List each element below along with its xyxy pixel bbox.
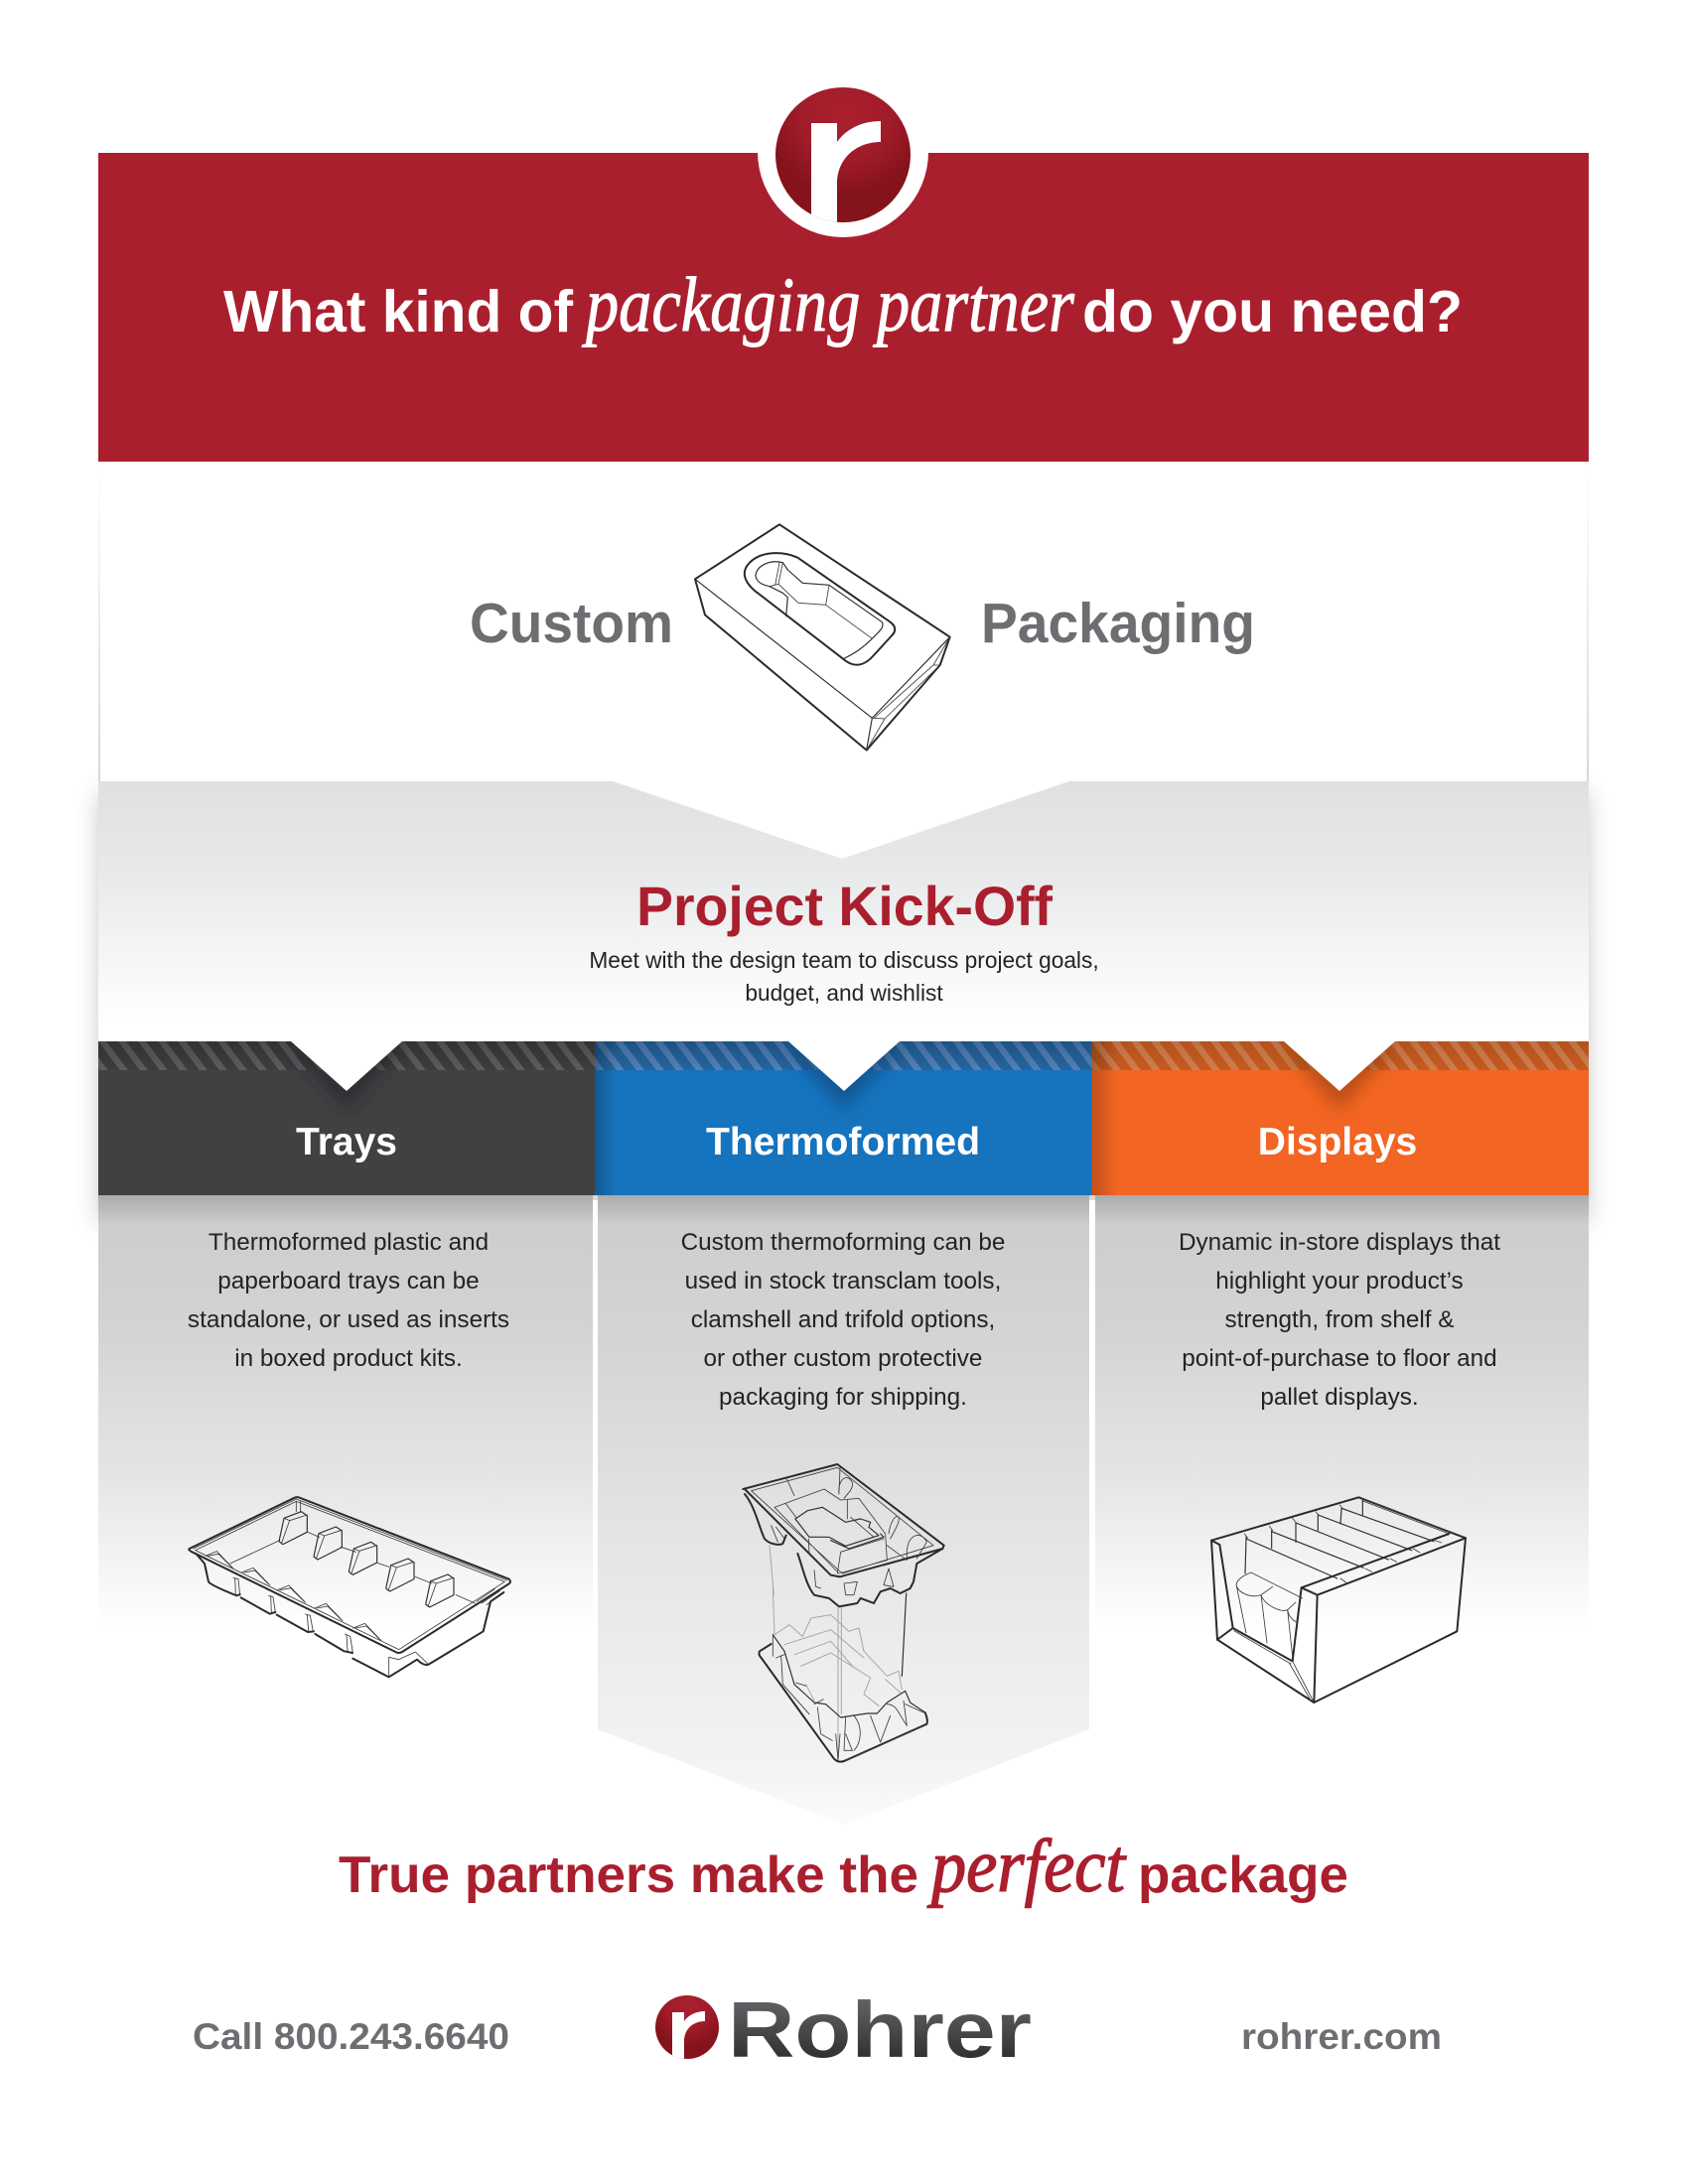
heading: packaging: Packaging <box>981 592 1255 655</box>
text: trays description: Thermoformed plastic and <box>209 1229 489 1256</box>
title <box>223 261 1463 347</box>
text: kick-off description: Meet with the design team to discuss project goals, <box>589 947 1099 973</box>
text: thermoformed description <box>681 1229 1005 1411</box>
footer: rohrer logo: Rohrer <box>728 1985 1032 2074</box>
text: thermoformed description: used in stock transclam tools, <box>685 1268 1001 1295</box>
tagline: perfect <box>926 1825 1127 1908</box>
text: displays description: Dynamic in-store displays that <box>1179 1229 1500 1256</box>
text: trays description <box>188 1229 509 1372</box>
text: displays description: pallet displays. <box>1260 1384 1419 1411</box>
heading: custom: Custom <box>470 592 673 655</box>
footer: phone: Call 800.243.6640 <box>193 2016 509 2057</box>
panel: header band <box>98 153 1589 462</box>
icon: display illustration <box>1211 1497 1466 1703</box>
icon: rohrer logo badge <box>758 87 928 237</box>
tagline: True partners make the <box>339 1846 918 1904</box>
panel: trays bar <box>98 1041 595 1195</box>
icon: tray illustration <box>189 1497 510 1677</box>
panel: displays body <box>1095 1195 1589 1632</box>
tagline: package <box>1138 1846 1348 1904</box>
title: packaging partner <box>582 261 1075 347</box>
text: thermoformed description: clamshell and trifold options, <box>691 1306 995 1333</box>
footer: website: rohrer.com <box>1241 2016 1442 2057</box>
text: displays description: highlight your product’s <box>1215 1268 1464 1295</box>
text: displays description <box>1179 1229 1500 1411</box>
panel: displays bar <box>1091 1041 1589 1195</box>
text: trays description: standalone, or used as inserts <box>188 1306 509 1333</box>
text: kick-off description: budget, and wishlist <box>745 980 943 1006</box>
heading: project kick-off: Project Kick-Off <box>636 875 1053 937</box>
text: trays description: paperboard trays can be <box>217 1268 480 1295</box>
panel: thermoformed bar <box>595 1041 1091 1195</box>
text: kick-off description <box>589 947 1099 1006</box>
panel shadow <box>103 794 1584 1221</box>
text: thermoformed description: Custom thermoforming can be <box>681 1229 1005 1256</box>
heading: displays: Displays <box>1258 1121 1417 1163</box>
panel: custom packaging <box>98 462 1589 869</box>
heading: thermoformed: Thermoformed <box>706 1121 980 1163</box>
text: displays description: strength, from shelf & <box>1225 1306 1454 1333</box>
title: What kind of <box>223 279 573 344</box>
footer: rohrer logo <box>655 1995 1031 2059</box>
bar shadow <box>98 1195 1589 1240</box>
icon: thermoformed clamshell illustration <box>743 1464 944 1762</box>
text: thermoformed description: packaging for shipping. <box>719 1384 967 1411</box>
tagline <box>339 1825 1348 1908</box>
panel: column backing <box>98 1195 1589 1632</box>
heading: trays: Trays <box>296 1121 397 1163</box>
panel: thermoformed body <box>598 1195 1089 1825</box>
text: displays description: point-of-purchase to floor and <box>1182 1345 1497 1372</box>
text: trays description: in boxed product kits. <box>234 1345 463 1372</box>
panel: trays body <box>98 1195 593 1632</box>
panel: project kick-off <box>98 781 1589 1042</box>
text: thermoformed description: or other custom protective <box>704 1345 982 1372</box>
title: do you need? <box>1082 279 1463 344</box>
icon: custom packaging box <box>695 524 950 751</box>
